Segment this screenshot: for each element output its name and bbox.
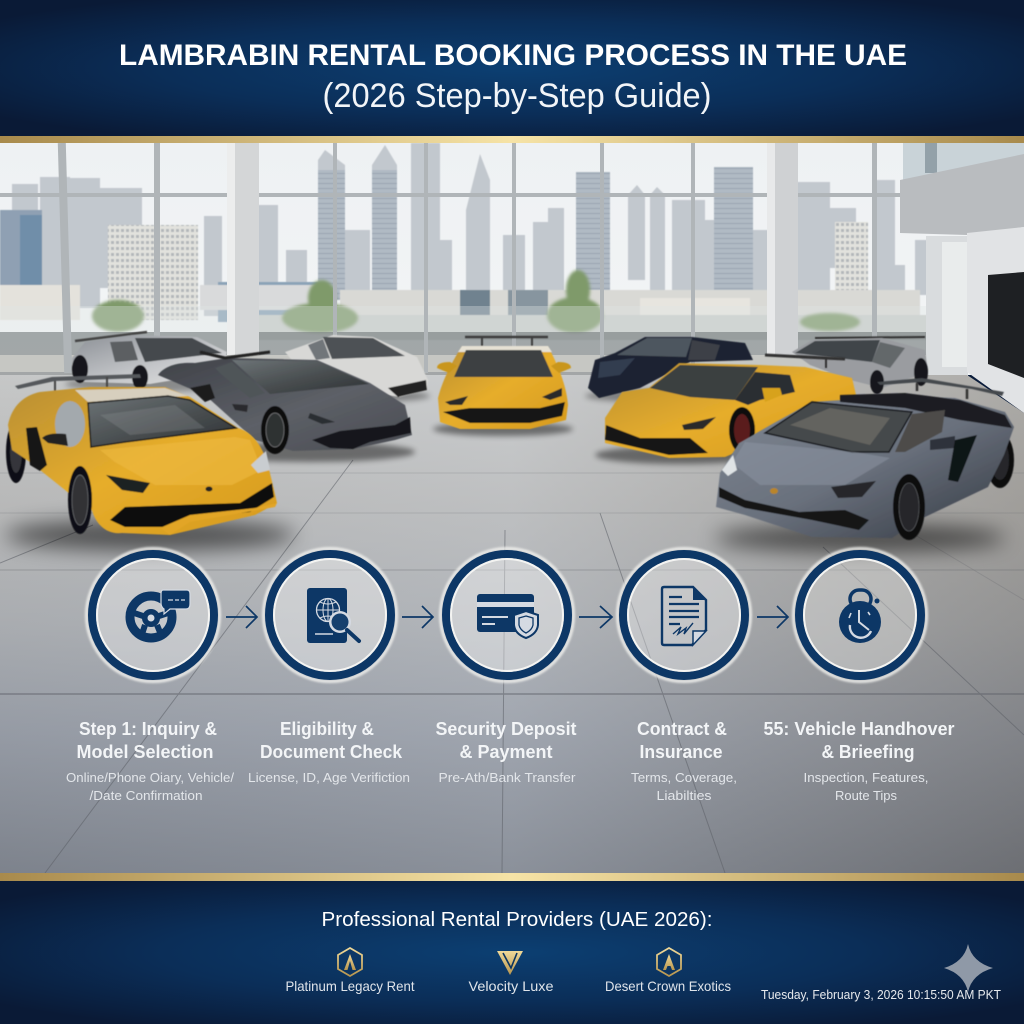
car floor shadows xyxy=(5,376,1005,552)
step 1 circle xyxy=(86,548,220,682)
provider: Platinum Legacy Rent: Platinum Legacy Rent xyxy=(286,978,415,994)
trees xyxy=(92,270,962,333)
step 5 text: & Brieefing xyxy=(822,741,914,762)
icon: steering wheel with chat bubble xyxy=(130,590,190,638)
subtitle: (2026 Step-by-Step Guide) xyxy=(322,77,712,115)
arrow 3 xyxy=(579,606,612,628)
step 1 text: Online/Phone Oiary, Vehicle/ xyxy=(66,771,235,785)
step 1 text: Step 1: Inquiry & xyxy=(79,718,217,739)
step 5 text xyxy=(764,718,954,803)
gold rule bottom xyxy=(0,873,1024,881)
step 3 text: & Payment xyxy=(460,741,552,762)
step 3 text xyxy=(436,718,576,785)
icon: passport with magnifier xyxy=(307,588,359,643)
step 1 text xyxy=(66,718,235,803)
step 4 text xyxy=(631,718,737,803)
icon: key fob timer xyxy=(839,590,881,643)
step 5 circle xyxy=(794,548,926,682)
step circles xyxy=(86,548,926,682)
provider: Velocity Luxe xyxy=(468,951,554,994)
columns xyxy=(227,143,798,355)
car: grey front right xyxy=(716,378,1014,540)
car: silver rear left xyxy=(72,332,227,389)
arrow 2 xyxy=(402,606,433,628)
car: navy rear right xyxy=(588,337,753,398)
scene: showroom background xyxy=(0,143,1024,873)
provider: Platinum Legacy Rent xyxy=(286,948,415,994)
icon: credit card with shield xyxy=(477,594,538,638)
step 1 text: Model Selection xyxy=(76,741,214,762)
car: yellow front left xyxy=(6,374,277,535)
icon: contract document xyxy=(662,587,706,645)
step 3 circle xyxy=(440,548,574,682)
step 3 text: Security Deposit xyxy=(436,718,576,739)
step labels xyxy=(66,718,954,803)
right wall and mezzanine xyxy=(900,143,1024,413)
step 5 text: 55: Vehicle Handhover xyxy=(764,718,954,739)
step 4 text: Insurance xyxy=(640,741,722,762)
floor tile lines xyxy=(0,460,1024,873)
timestamp: Tuesday, February 3, 2026 10:15:50 AM PKT xyxy=(761,988,1001,1002)
title: LAMBRABIN RENTAL BOOKING PROCESS IN THE UAE xyxy=(119,39,907,72)
step 2 text: Eligibility & xyxy=(280,718,374,739)
glass railing xyxy=(0,332,930,375)
header band xyxy=(0,0,1024,136)
step 2 text xyxy=(248,718,410,785)
car: yellow centre xyxy=(437,337,571,429)
step 2 text: Document Check xyxy=(260,741,403,762)
arrow 4 xyxy=(757,606,788,628)
step 4 circle xyxy=(618,548,750,682)
car: silver rear right xyxy=(792,337,928,394)
step 3 text: Pre-Ath/Bank Transfer xyxy=(438,771,576,785)
icon: sparkle watermark xyxy=(944,944,993,992)
car: dark grey mid left xyxy=(158,352,412,454)
step 5 text: Route Tips xyxy=(835,789,897,803)
footer band xyxy=(0,881,1024,1024)
step 5 text: Inspection, Features, xyxy=(804,771,928,785)
car: white rear xyxy=(285,335,428,397)
car: yellow front right xyxy=(605,355,856,458)
footer heading: Professional Rental Providers (UAE 2026): xyxy=(322,908,712,931)
step 4 text: Terms, Coverage, xyxy=(631,771,737,785)
step 2 circle xyxy=(264,548,396,682)
mullions xyxy=(0,143,900,373)
provider: Desert Crown Exotics: Desert Crown Exotics xyxy=(605,978,731,994)
gold rule top xyxy=(0,136,1024,143)
arrow 1 xyxy=(226,606,257,628)
step 4 text: Liabilties xyxy=(656,789,712,803)
step 1 text: /Date Confirmation xyxy=(90,789,203,803)
step 4 text: Contract & xyxy=(637,718,727,739)
provider: Velocity Luxe: Velocity Luxe xyxy=(468,978,554,994)
city skyline xyxy=(0,143,930,340)
provider: Desert Crown Exotics xyxy=(605,948,731,994)
floor xyxy=(0,375,1024,873)
step 2 text: License, ID, Age Verifiction xyxy=(248,771,410,785)
